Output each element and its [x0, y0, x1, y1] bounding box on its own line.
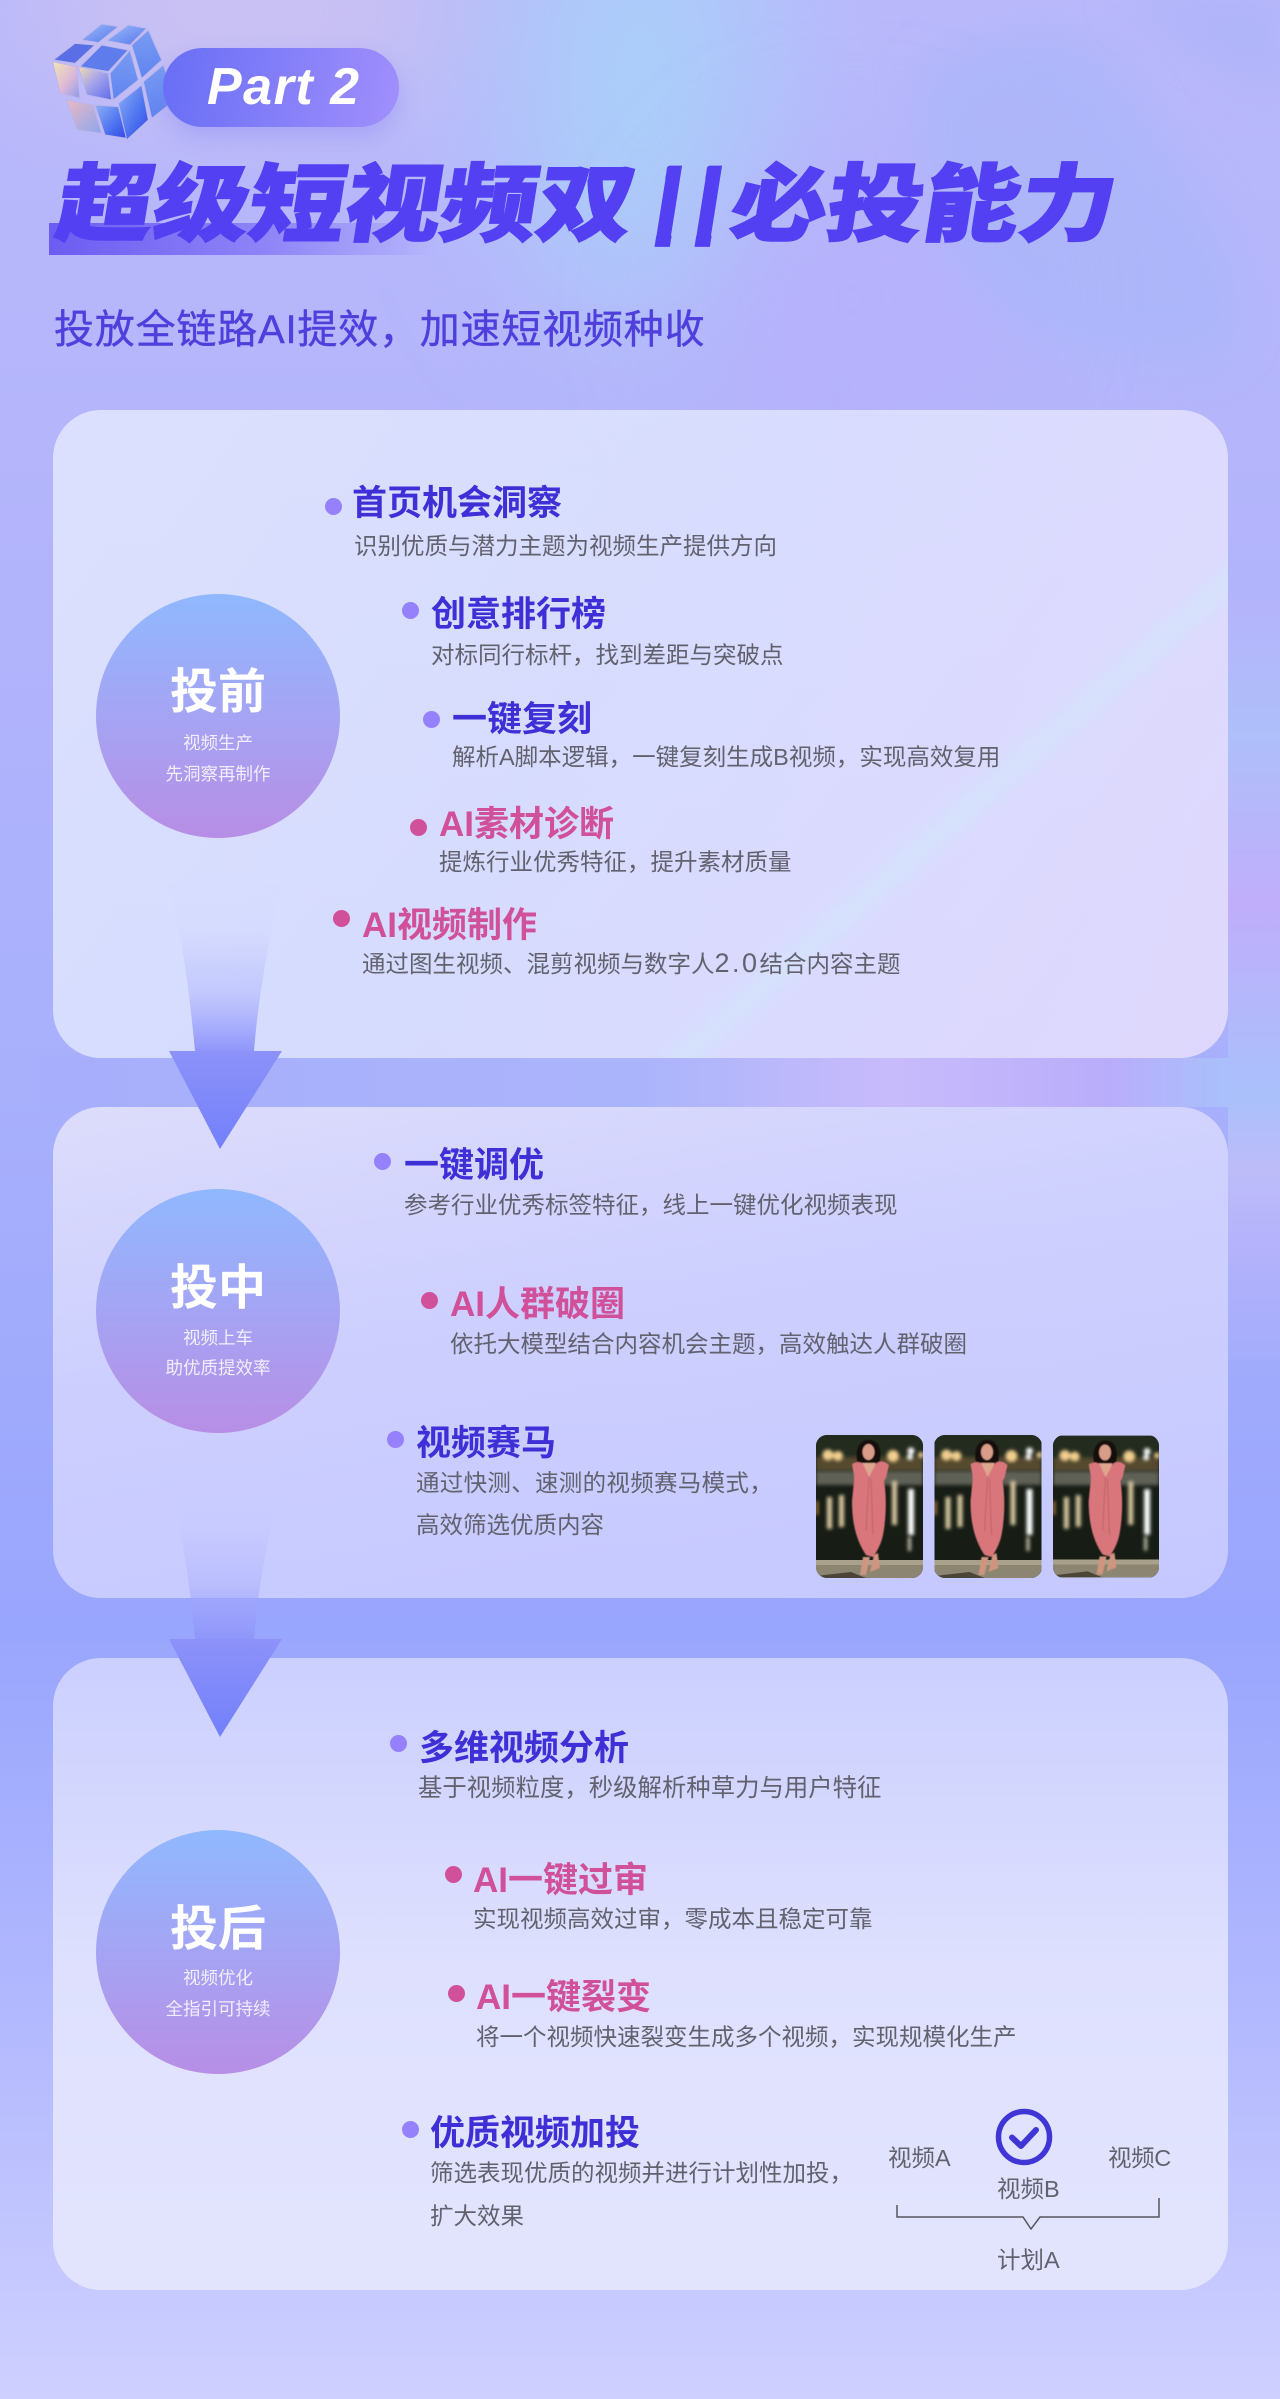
item: 多维视频分析 [390, 1729, 881, 1802]
item: 多维视频分析: 基于视频粒度，秒级解析种草力与用户特征 [418, 1775, 881, 1802]
panel: after launch [53, 1658, 1228, 2290]
label: 计划A: 计划A [997, 2247, 1060, 2273]
icon: check circle [996, 2108, 1052, 2166]
circle: after launch: 全指引可持续 [166, 1999, 270, 2019]
item: AI一键过审: AI一键过审 [473, 1861, 648, 1900]
label: 视频C: 视频C [1108, 2145, 1171, 2171]
circle: before launch: 投前 [170, 666, 266, 719]
arrow: during to after [169, 1558, 282, 1737]
circle: during launch: 助优质提效率 [166, 1358, 270, 1378]
photo: creative thumbnails [816, 1435, 1159, 1578]
circle: before launch [96, 594, 340, 838]
item: 创意排行榜 [402, 595, 784, 668]
circle: during launch: 投中 [170, 1262, 266, 1315]
item: 首页机会洞察: 识别优质与潜力主题为视频生产提供方向 [354, 533, 777, 559]
item: 视频赛马: 通过快测、速测的视频赛马模式， [416, 1470, 773, 1496]
item: 视频赛马: 视频赛马 [416, 1424, 556, 1463]
item: AI素材诊断: AI素材诊断 [439, 805, 614, 844]
label: 视频A: 视频A [888, 2145, 951, 2171]
item: 视频赛马: 高效筛选优质内容 [416, 1512, 604, 1538]
item: 视频赛马 [387, 1424, 773, 1538]
panel: before launch [53, 410, 1228, 1058]
item: 一键调优: 参考行业优秀标签特征，线上一键优化视频表现 [404, 1192, 898, 1218]
item: 一键调优: 一键调优 [404, 1146, 544, 1185]
title highlight bar [49, 223, 439, 255]
item: AI一键裂变: 将一个视频快速裂变生成多个视频，实现规模化生产 [476, 2024, 1016, 2050]
item: AI视频制作: 通过图生视频、混剪视频与数字人2.0结合内容主题 [362, 948, 901, 978]
item: 多维视频分析: 多维视频分析 [419, 1729, 629, 1768]
circle: during launch [96, 1189, 340, 1433]
title: 1 [620, 142, 712, 270]
item: 首页机会洞察: 首页机会洞察 [352, 484, 562, 523]
title [51, 158, 1124, 253]
item: 优质视频加投: 筛选表现优质的视频并进行计划性加投， [430, 2160, 853, 2186]
item: 优质视频加投: 优质视频加投 [430, 2114, 640, 2153]
panel: during launch [53, 1107, 1228, 1598]
circle: after launch [96, 1830, 340, 2074]
decorative light streak [53, 410, 1228, 1058]
item: AI人群破圈 [421, 1285, 967, 1357]
circle: before launch: 先洞察再制作 [166, 764, 270, 784]
item: AI一键过审: 实现视频高效过审，零成本且稳定可靠 [473, 1906, 872, 1932]
circle: during launch: 视频上车 [183, 1328, 253, 1348]
item: 一键复刻 [423, 700, 1000, 770]
bracket [896, 2198, 1160, 2230]
title: 超级短视频双 [51, 158, 642, 253]
item: AI视频制作 [333, 906, 901, 978]
item: AI视频制作: AI视频制作 [362, 906, 537, 945]
item: 一键调优 [374, 1146, 898, 1218]
badge: Part 2: Part 2 [207, 58, 361, 116]
badge: Part 2 [163, 48, 399, 127]
circle: after launch: 投后 [170, 1903, 266, 1956]
item: 优质视频加投: 扩大效果 [430, 2203, 524, 2229]
item: AI一键过审 [445, 1861, 872, 1932]
circle: after launch: 视频优化 [183, 1968, 253, 1988]
item: 创意排行榜: 对标同行标杆，找到差距与突破点 [431, 642, 784, 668]
item: AI人群破圈: AI人群破圈 [450, 1285, 625, 1324]
title: 必投能力 [725, 158, 1124, 253]
diagram: plan A videos [888, 2108, 1171, 2273]
subtitle: 投放全链路AI提效，加速短视频种收 [54, 308, 705, 352]
item: AI人群破圈: 依托大模型结合内容机会主题，高效触达人群破圈 [450, 1331, 967, 1357]
item: 一键复刻: 一键复刻 [452, 700, 592, 739]
item: 一键复刻: 解析A脚本逻辑，一键复刻生成B视频，实现高效复用 [452, 744, 1000, 770]
arrow: before to during [169, 952, 282, 1149]
item: 首页机会洞察 [325, 484, 777, 559]
title: 1 [660, 142, 752, 270]
circle: before launch: 视频生产 [183, 733, 253, 753]
item: 创意排行榜: 创意排行榜 [431, 595, 606, 634]
item: AI一键裂变: AI一键裂变 [476, 1978, 651, 2017]
label: 视频B: 视频B [997, 2176, 1060, 2202]
item: AI素材诊断 [410, 805, 792, 875]
item: 优质视频加投 [402, 2114, 853, 2229]
item: AI素材诊断: 提炼行业优秀特征，提升素材质量 [439, 849, 792, 875]
item: AI一键裂变 [448, 1978, 1016, 2050]
icon: glass cube [52, 24, 168, 140]
